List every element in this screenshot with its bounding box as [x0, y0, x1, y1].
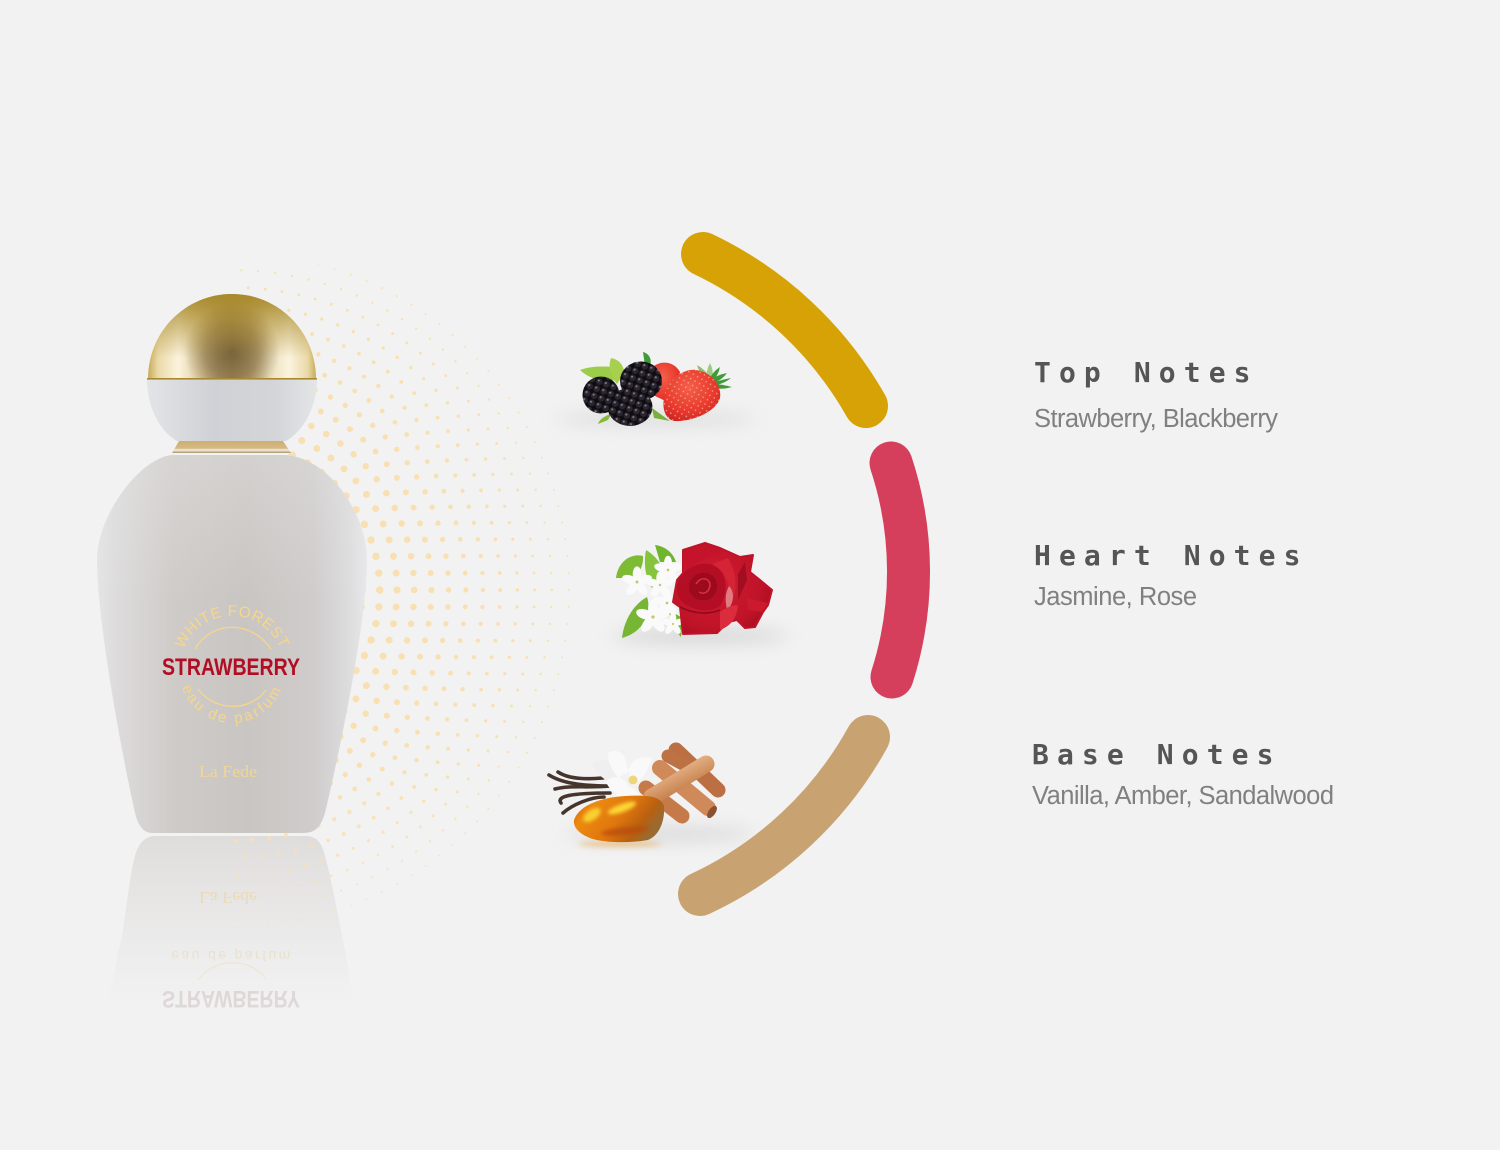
reflected brand text: La Fede: [199, 888, 257, 907]
icon: berries: [555, 352, 755, 426]
label: White Forest: WHITE FOREST: [174, 605, 290, 646]
icon: jasmine and rose: [612, 543, 788, 642]
arc: heart notes: [891, 463, 909, 677]
bottle body: [97, 455, 367, 833]
jasmine leaves: [616, 545, 683, 638]
reflected product text: STRAWBERRY: [162, 985, 300, 1012]
blackberries: [582, 362, 670, 426]
rose bloom: [673, 543, 772, 634]
label: eau de parfum: eau de parfum: [183, 686, 281, 726]
perfume bottle: [97, 294, 367, 833]
reflected product text: [162, 948, 300, 1012]
text: base notes ingredients: Vanilla, Amber, Sandalwood: [1032, 782, 1334, 810]
arc: base notes: [700, 737, 868, 894]
jasmine flowers: [621, 556, 685, 635]
label: Strawberry: STRAWBERRY: [162, 654, 300, 681]
light green leaves: [580, 352, 651, 424]
gold dome cap: [147, 294, 317, 380]
text: heart notes ingredients: Jasmine, Rose: [1034, 583, 1197, 611]
rear strawberry: [649, 363, 680, 404]
heading: Heart Notes: Heart Notes: [1034, 539, 1309, 572]
vanilla pods: [549, 772, 612, 813]
white flower: [592, 751, 652, 796]
arc: top notes: [703, 254, 866, 406]
amber stone: [574, 796, 664, 847]
heading: Top Notes: Top Notes: [1034, 356, 1259, 389]
halftone dot fan behind bottle: [232, 253, 569, 927]
bottle reflection: [108, 836, 355, 1012]
text: top notes ingredients: Strawberry, Blackberry: [1034, 405, 1278, 433]
reflected body: [108, 836, 355, 1010]
bottle label: [162, 605, 300, 781]
reflected product text: eau de parfum: [171, 948, 293, 964]
heading: Base Notes: Base Notes: [1032, 738, 1282, 771]
sandalwood sticks: [646, 750, 719, 820]
icon: vanilla, amber and sandalwood: [549, 750, 755, 847]
white collar: [147, 379, 317, 441]
gold neck ring: [172, 441, 291, 453]
label: La Fede: La Fede: [199, 762, 257, 781]
big strawberry: [663, 363, 732, 421]
